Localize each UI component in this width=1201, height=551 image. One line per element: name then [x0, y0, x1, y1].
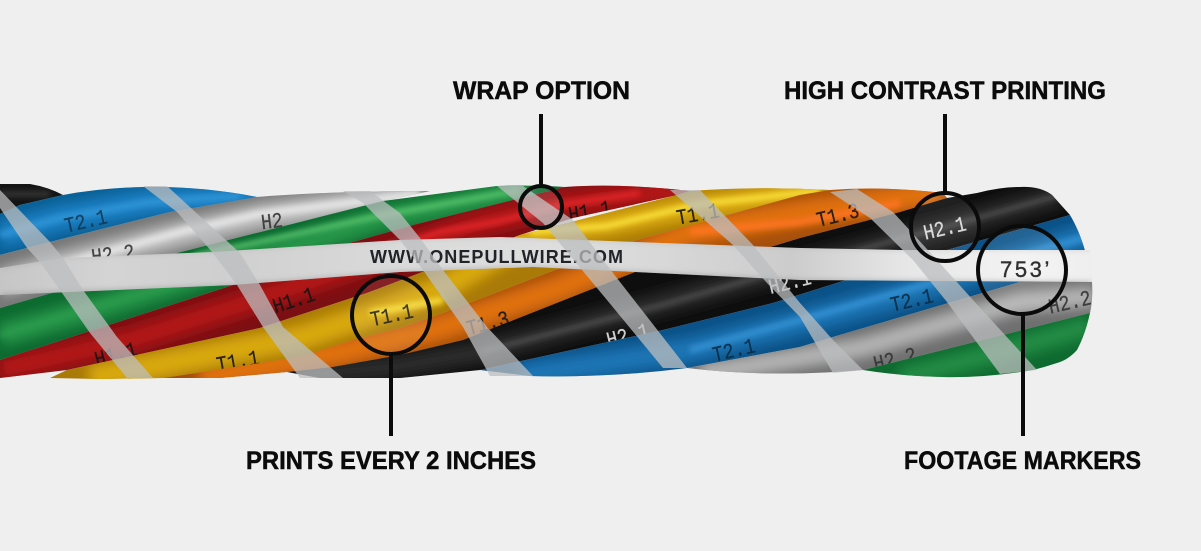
callout: prints every 2 inches — [246, 276, 536, 475]
label: T1.3 upper: T1.3 — [814, 199, 862, 233]
label: T1.1 in circle: T1.1 — [368, 299, 416, 333]
label: T2.1 right: T2.1 — [888, 284, 936, 318]
label: T1.1 lower: T1.1 — [215, 346, 261, 378]
wire: orange — [150, 180, 960, 380]
wrap strip 6 — [830, 189, 1037, 374]
heading: footage markers: FOOTAGE MARKERS — [904, 447, 1141, 475]
callout: wrap option — [453, 77, 630, 228]
wire: green upper — [0, 180, 580, 365]
label: H2.2 upper left: H2.2 — [90, 240, 136, 270]
footage marker number: 753’ — [1000, 257, 1052, 282]
wire: green lower right — [863, 313, 1090, 378]
wrap strip 3 — [343, 191, 533, 376]
circle: footage markers — [978, 226, 1066, 314]
leader line: high contrast printing — [943, 114, 947, 192]
circle: prints every 2 inches — [352, 276, 430, 354]
label: T1.3 lower: T1.3 — [464, 306, 512, 342]
callout: footage markers — [904, 226, 1141, 475]
wire: yellow — [40, 180, 840, 380]
label: T1.1 upper: T1.1 — [675, 199, 721, 231]
label: H1.1 centre left: H1.1 — [270, 282, 318, 320]
label: H1.1 top: H1.1 — [567, 196, 613, 228]
cable: twisted coloured wires — [0, 180, 1100, 385]
label: H2.2 bottom: H2.2 — [871, 343, 919, 377]
wire: black upper left — [0, 184, 63, 214]
label: H2.1 centre: H2.1 — [604, 319, 652, 353]
callout: high contrast printing — [784, 77, 1106, 261]
leader line: footage markers — [1021, 314, 1025, 436]
wire: red — [0, 180, 700, 380]
label: H2 upper: H2 — [260, 208, 284, 236]
translucent diagonal wraps — [0, 186, 1037, 378]
label: H2.1 in circle: H2.1 — [921, 212, 969, 246]
circle: high contrast printing — [911, 193, 979, 261]
wrap strip 4 — [497, 186, 687, 368]
label: T2.1 upper left: T2.1 — [62, 205, 110, 239]
wire: grey lower — [688, 282, 1092, 374]
wrap strip 5 — [670, 190, 863, 373]
wire: black — [280, 180, 1080, 380]
label: T2.1 centre: T2.1 — [710, 334, 758, 368]
wrap strip 2 — [143, 186, 343, 378]
wire: blue lower — [470, 210, 1100, 380]
circle: wrap option — [520, 186, 562, 228]
label: T1.3 middle: T1.3 — [748, 262, 796, 298]
label: H2.2 right end: H2.2 — [1046, 286, 1094, 320]
heading: prints every 2 inches: PRINTS EVERY 2 INCHES — [246, 447, 536, 475]
band text: website: WWW.ONEPULLWIRE.COM — [370, 247, 623, 267]
heading: high contrast printing: HIGH CONTRAST PRINTING — [784, 77, 1106, 105]
heading: wrap option: WRAP OPTION — [453, 77, 630, 105]
leader line: wrap option — [539, 114, 543, 186]
leader line: prints every 2 inches — [389, 354, 393, 436]
label: H1.1 lower left: H1.1 — [92, 337, 140, 373]
wire: blue upper left — [0, 186, 257, 255]
wrap strip 1 — [0, 190, 153, 378]
white wrap band — [0, 237, 1092, 295]
wire: grey upper left — [0, 191, 430, 308]
label: H2.1 middle: H2.1 — [766, 266, 814, 300]
